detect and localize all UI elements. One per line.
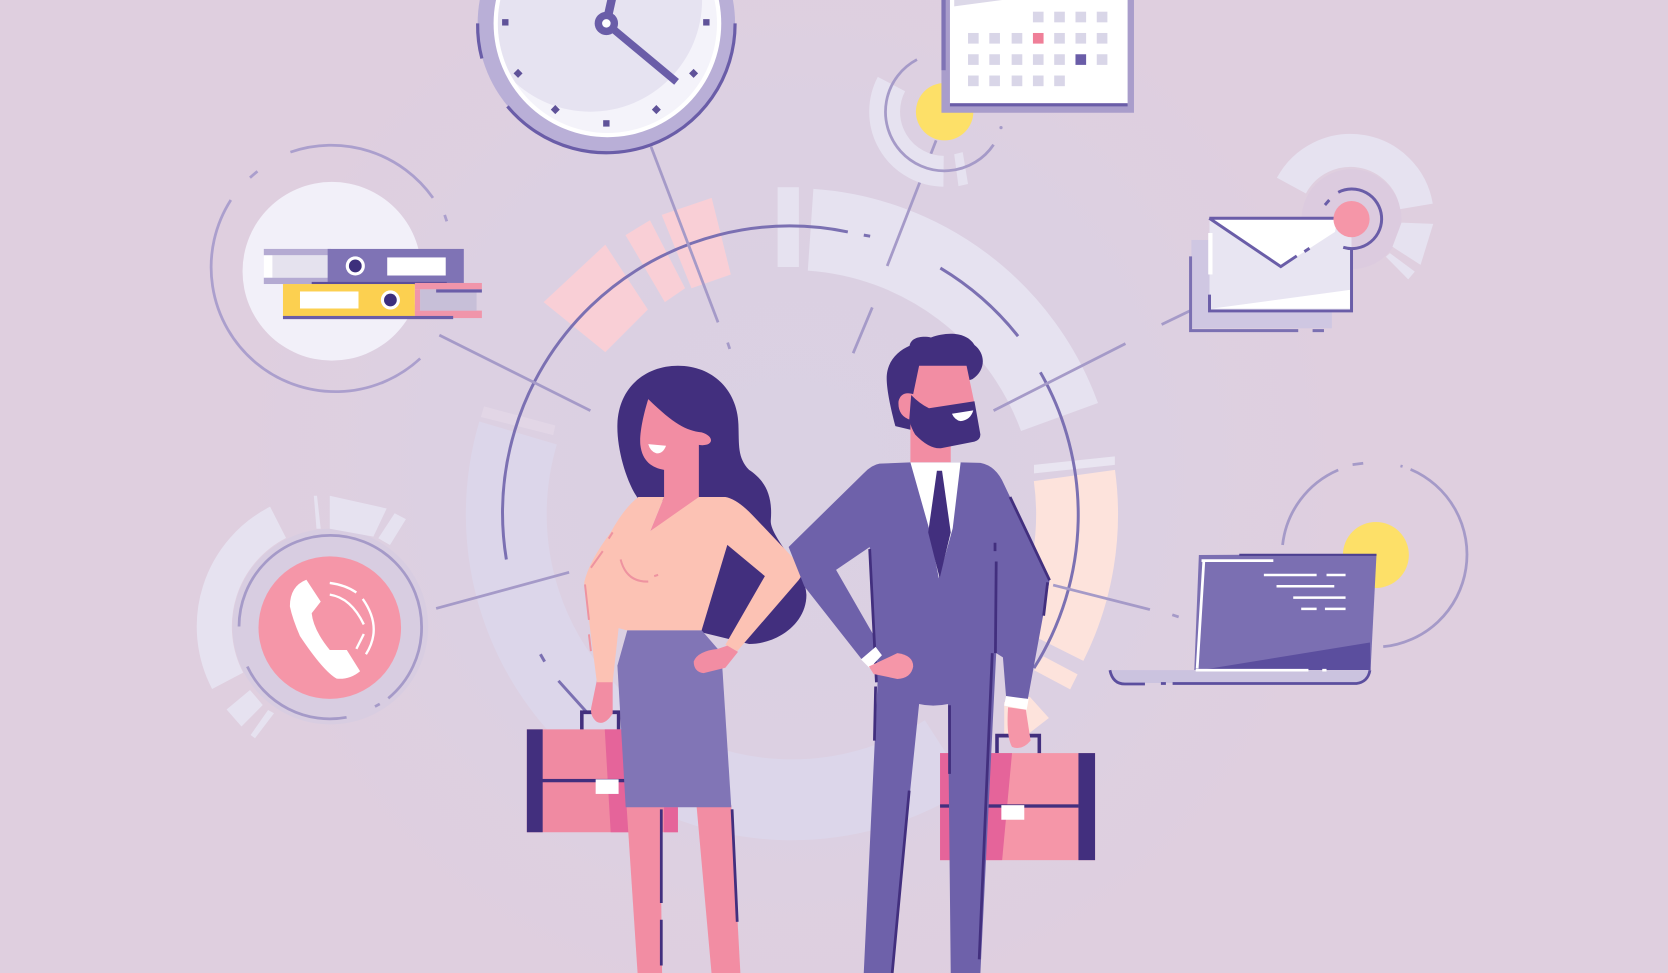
man tie — [928, 471, 951, 578]
man hand left — [869, 653, 913, 679]
woman skirt — [617, 630, 731, 807]
woman briefcase — [527, 712, 678, 832]
envelope halo disc — [1302, 169, 1402, 269]
envelope light arc — [1291, 150, 1417, 206]
phone handset — [290, 580, 360, 679]
man shirt — [910, 462, 961, 578]
envelope small blocks — [1392, 223, 1433, 265]
central dashed ring — [503, 226, 1078, 713]
phone inner disc — [232, 529, 428, 724]
laptop screen — [1194, 554, 1377, 670]
envelope body — [1210, 218, 1352, 311]
laptop ring arcs — [1283, 463, 1467, 647]
calendar line arc — [885, 60, 994, 171]
man cuff right — [1004, 696, 1029, 710]
phone ring arcs — [239, 535, 422, 719]
man neck and face — [898, 366, 974, 466]
binder bottom yellow — [283, 284, 415, 317]
phone light arc — [214, 522, 278, 681]
man figure — [789, 334, 1050, 973]
radial connector lines — [436, 140, 1190, 617]
band: right small bar — [1034, 456, 1115, 473]
woman blouse details — [585, 532, 658, 651]
man cuff left — [861, 647, 882, 668]
phone signal arcs — [330, 583, 374, 654]
woman neck and face — [640, 399, 711, 531]
laptop sun — [1343, 522, 1409, 588]
figures — [527, 334, 1095, 973]
icon: calendar with sun — [885, 0, 1134, 186]
laptop base — [1112, 670, 1370, 683]
man hand right — [1008, 707, 1031, 748]
icon: envelope — [1191, 150, 1433, 331]
binder ring arcs — [211, 145, 447, 392]
man suit — [789, 462, 1050, 973]
phone small blocks — [227, 496, 406, 738]
phone disc — [258, 556, 401, 699]
woman figure — [584, 366, 806, 973]
illustration canvas — [196, 0, 1468, 973]
icon: binders — [211, 145, 482, 392]
binder top purple — [264, 249, 331, 255]
pink block 3 — [662, 198, 731, 288]
calendar sheet — [941, 0, 1134, 113]
woman hand left — [591, 680, 613, 723]
man smile — [952, 410, 973, 421]
woman leg shadows — [661, 809, 737, 966]
band: top small block — [778, 187, 799, 267]
woman smile — [648, 444, 666, 453]
calendar small block — [954, 152, 968, 186]
woman legs — [627, 805, 662, 973]
man briefcase — [940, 736, 1095, 860]
band: left and bottom — [506, 433, 947, 800]
calendar light arcs — [885, 84, 944, 171]
pink block 1 — [544, 245, 648, 352]
band: left small bar — [481, 406, 555, 435]
icon: phone — [214, 496, 428, 738]
envelope shadow sheet — [1191, 240, 1332, 328]
man suit shadows — [870, 497, 1050, 973]
band: right peach — [1047, 476, 1077, 643]
central radial bands — [481, 187, 1115, 800]
man hair — [887, 334, 983, 430]
pink block 2 — [626, 220, 685, 302]
binder backdrop circle — [243, 182, 421, 361]
calendar sun — [916, 83, 973, 140]
band: peach lower piece — [1034, 656, 1078, 689]
woman hand right — [694, 646, 738, 673]
man beard — [909, 395, 980, 448]
calendar dot — [999, 126, 1003, 129]
envelope notification — [1333, 201, 1370, 237]
laptop code lines — [1264, 575, 1346, 609]
band: peach behind hand — [1004, 697, 1049, 739]
icon: clock — [478, 0, 735, 153]
icon: laptop — [1110, 463, 1467, 684]
woman blouse — [584, 497, 802, 682]
band: top right — [811, 230, 1060, 417]
woman hair — [617, 366, 806, 644]
